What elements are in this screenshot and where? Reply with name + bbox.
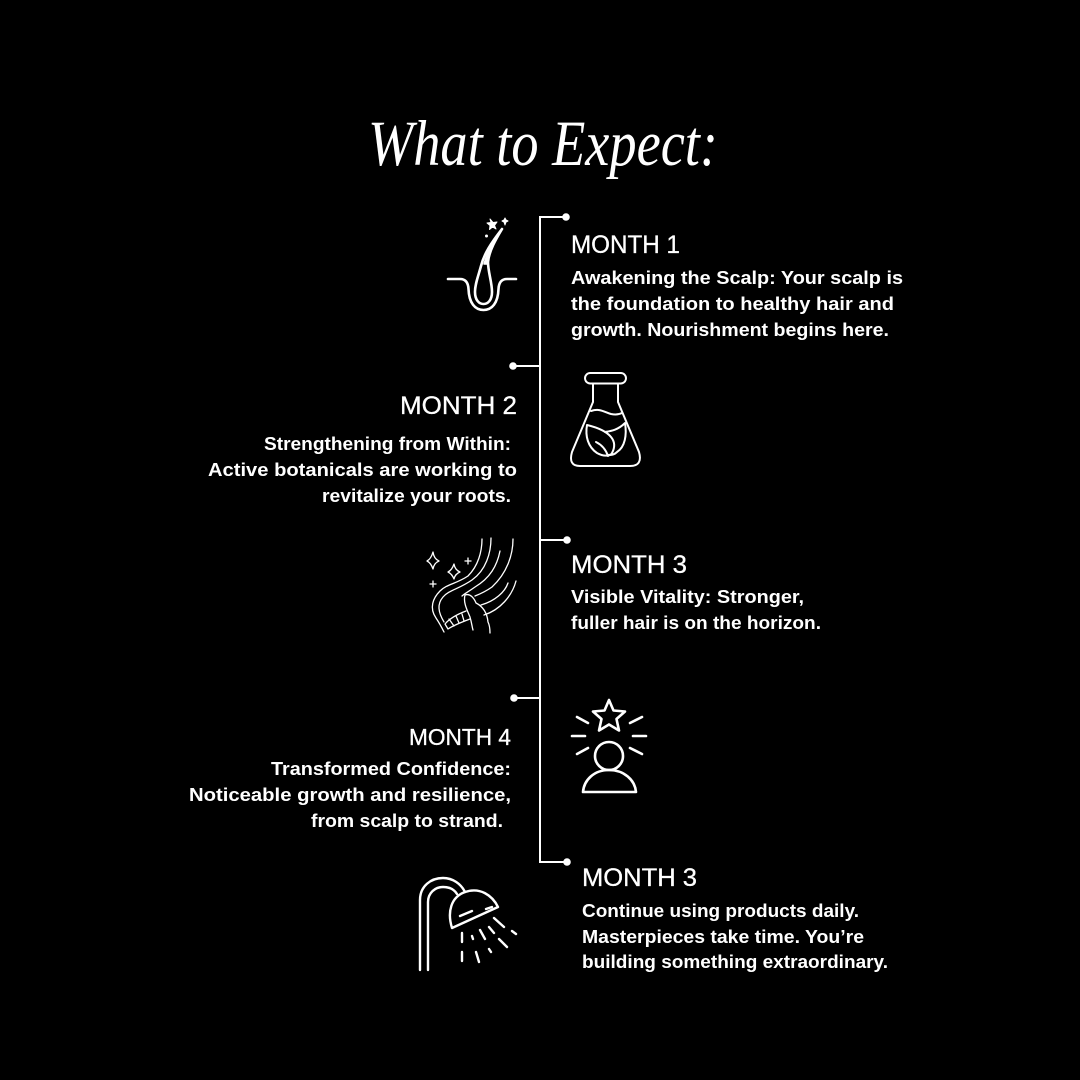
icon: person with star	[572, 700, 646, 792]
month 5 text	[582, 864, 888, 972]
month 2 text: Active botanicals are working to	[208, 459, 517, 480]
month 3 text: Visible Vitality: Stronger,	[571, 586, 804, 607]
month 1 text: Awakening the Scalp: Your scalp is	[571, 267, 903, 288]
title: What to Expect:	[368, 108, 718, 180]
month 4 text: MONTH 4	[409, 724, 511, 750]
timeline	[509, 213, 571, 866]
month 2 text	[208, 392, 517, 506]
icon: shower head	[420, 878, 516, 970]
month 1 text	[571, 231, 903, 340]
month 4 text: from scalp to strand.	[311, 810, 503, 831]
month 4 text: Transformed Confidence:	[271, 758, 511, 779]
month 5 text: Masterpieces take time. You’re	[582, 926, 864, 947]
month 2 text: Strengthening from Within:	[264, 433, 511, 454]
month 1 text: growth. Nourishment begins here.	[571, 319, 889, 340]
month 1 text: the foundation to healthy hair and	[571, 293, 894, 314]
icon: hair follicle	[448, 218, 516, 310]
month 4 text	[189, 724, 511, 831]
month 5 text: Continue using products daily.	[582, 900, 859, 921]
icon: hair strands and sparkles	[427, 538, 516, 633]
month 4 text: Noticeable growth and resilience,	[189, 784, 511, 805]
month 1 text: MONTH 1	[571, 231, 680, 259]
month 3 text	[571, 551, 821, 633]
month 2 text: MONTH 2	[400, 392, 517, 420]
month 5 text: building something extraordinary.	[582, 951, 888, 972]
month 3 text: MONTH 3	[571, 551, 687, 579]
month 5 text: MONTH 3	[582, 864, 697, 892]
month 2 text: revitalize your roots.	[322, 485, 511, 506]
month 3 text: fuller hair is on the horizon.	[571, 612, 821, 633]
icon: flask with leaf	[571, 373, 640, 466]
